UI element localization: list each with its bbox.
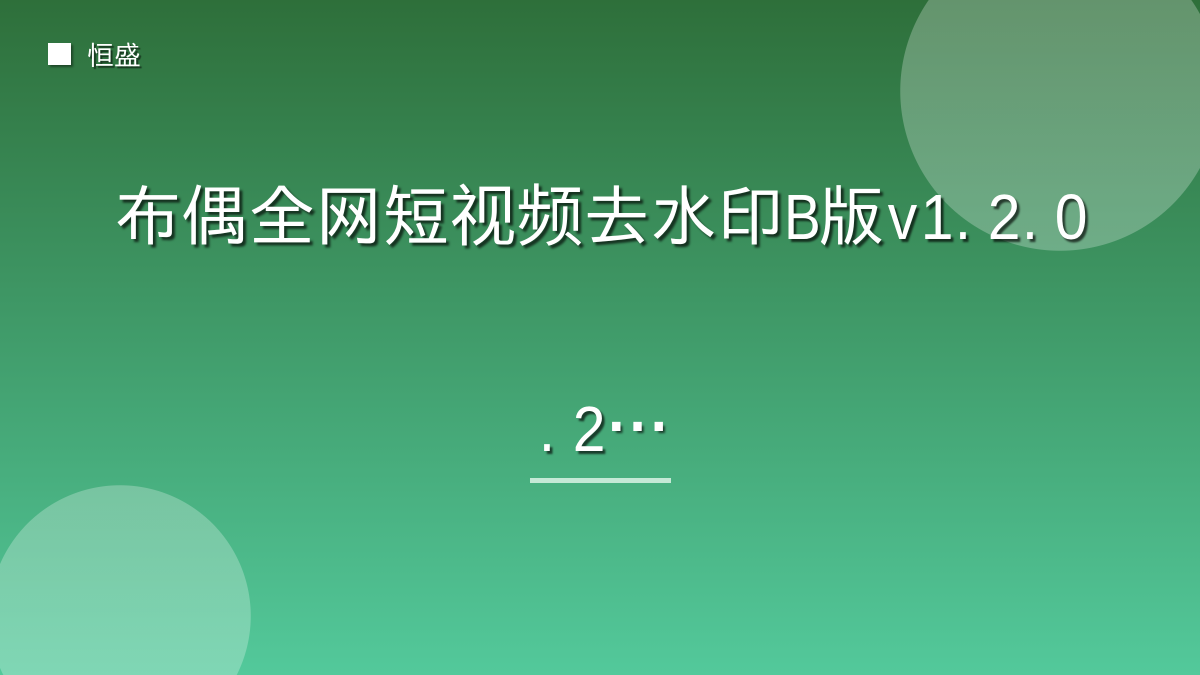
title: 0	[1055, 181, 1088, 253]
title: B	[784, 181, 821, 253]
title: v	[888, 181, 917, 253]
title: …	[604, 370, 671, 445]
title underline	[530, 478, 671, 483]
title	[114, 181, 1090, 465]
title: 2	[572, 393, 605, 465]
decorative circle: bottom left	[0, 485, 251, 675]
title: 1	[921, 181, 954, 253]
title: .	[1022, 181, 1038, 253]
title: 2	[988, 181, 1021, 253]
icon: white square	[48, 43, 71, 65]
title: 布偶全网短视频去水印 版	[114, 182, 885, 249]
title: .	[539, 393, 555, 465]
title: .	[955, 181, 971, 253]
decorative circle: top right	[900, 0, 1200, 251]
brand label	[48, 42, 142, 70]
brand name: 恒盛	[87, 42, 141, 69]
